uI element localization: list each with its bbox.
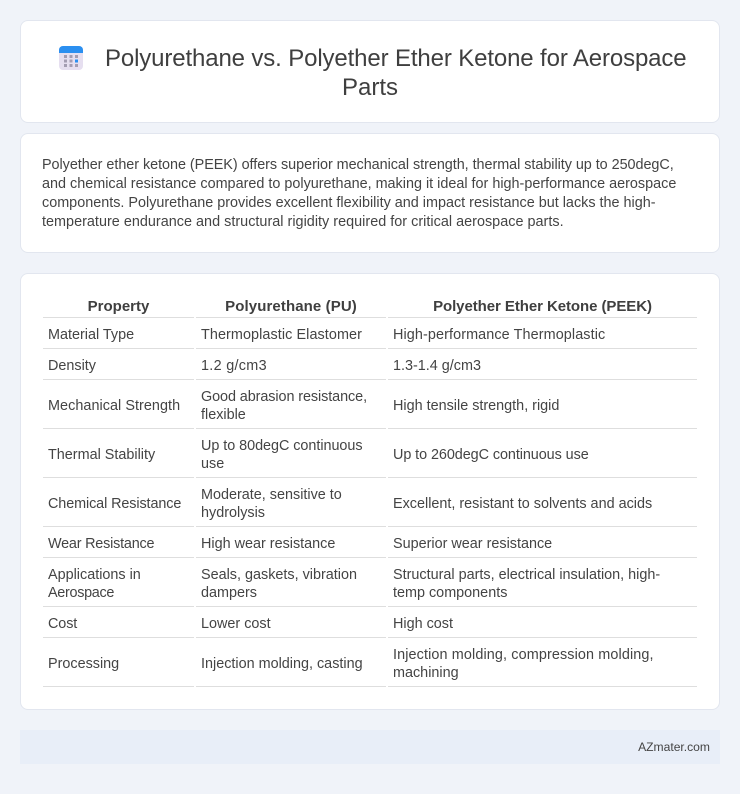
table: comparison: Mechanical Strength bbox=[48, 398, 180, 414]
table: comparison: High cost bbox=[393, 616, 453, 632]
text block: summary: Polyether ether ketone (PEEK) offers superior mechanical strength, thermal stability up to 250degC, bbox=[42, 157, 674, 173]
panel: comparison table card bbox=[20, 273, 720, 710]
panel: summary card bbox=[20, 133, 720, 253]
table: comparison: Chemical Resistance bbox=[48, 496, 181, 512]
footer bar bbox=[20, 730, 720, 764]
table: comparison: temp components bbox=[393, 585, 507, 601]
table: comparison: 1.3-1.4 g/cm3 bbox=[393, 358, 481, 374]
table: comparison: Up to 80degC continuous bbox=[201, 438, 362, 454]
table: comparison bbox=[43, 298, 697, 687]
table: comparison: Density bbox=[48, 358, 96, 374]
table: comparison: 1.2 g/cm3 bbox=[201, 358, 267, 374]
table: comparison: Lower cost bbox=[201, 616, 271, 632]
table: comparison: Polyurethane (PU) bbox=[225, 298, 357, 315]
table: comparison: Aerospace bbox=[48, 585, 114, 601]
table: comparison: High-performance Thermoplastic bbox=[393, 327, 605, 343]
table: comparison: Cost bbox=[48, 616, 77, 632]
table: comparison: flexible bbox=[201, 407, 246, 423]
title: Polyurethane vs. Polyether Ether Ketone for Aerospace bbox=[105, 45, 686, 72]
table: comparison: Moderate, sensitive to bbox=[201, 487, 342, 503]
table: comparison: Excellent, resistant to solvents and acids bbox=[393, 496, 652, 512]
table: comparison: High wear resistance bbox=[201, 536, 335, 552]
table: comparison: hydrolysis bbox=[201, 505, 265, 521]
table: comparison: Injection molding, casting bbox=[201, 656, 363, 672]
table: comparison: Thermoplastic Elastomer bbox=[201, 327, 362, 343]
table: comparison: Up to 260degC continuous use bbox=[393, 447, 589, 463]
title bbox=[105, 45, 686, 101]
table: comparison: Material Type bbox=[48, 327, 134, 343]
table: comparison: Injection molding, compression molding, bbox=[393, 647, 654, 663]
table: comparison: Superior wear resistance bbox=[393, 536, 552, 552]
table: comparison: dampers bbox=[201, 585, 257, 601]
title: Parts bbox=[342, 74, 398, 101]
table: comparison: Thermal Stability bbox=[48, 447, 155, 463]
text block: summary: components. Polyurethane provides excellent flexibility and impact resistance but lacks the high- bbox=[42, 195, 656, 211]
text block: summary: temperature endurance and structural rigidity required for critical aerospace parts. bbox=[42, 214, 564, 230]
table: comparison: Wear Resistance bbox=[48, 536, 154, 552]
table: comparison: Good abrasion resistance, bbox=[201, 389, 367, 405]
footer text: AZmater.com bbox=[638, 740, 710, 754]
table: comparison: Processing bbox=[48, 656, 119, 672]
panel: title card bbox=[20, 20, 720, 123]
text block: summary bbox=[42, 157, 676, 230]
table: comparison: use bbox=[201, 456, 224, 472]
text block: summary: and chemical resistance compared to polyurethane, making it ideal for high-performance aerospace bbox=[42, 176, 676, 192]
table: comparison: Property bbox=[88, 298, 149, 315]
icon: calendar bbox=[59, 46, 83, 70]
table: comparison: Structural parts, electrical insulation, high- bbox=[393, 567, 660, 583]
table: comparison: High tensile strength, rigid bbox=[393, 398, 559, 414]
table: comparison: machining bbox=[393, 665, 459, 681]
table: comparison: Seals, gaskets, vibration bbox=[201, 567, 357, 583]
table: comparison: Polyether Ether Ketone (PEEK) bbox=[433, 298, 652, 315]
table: comparison: Applications in bbox=[48, 567, 141, 583]
